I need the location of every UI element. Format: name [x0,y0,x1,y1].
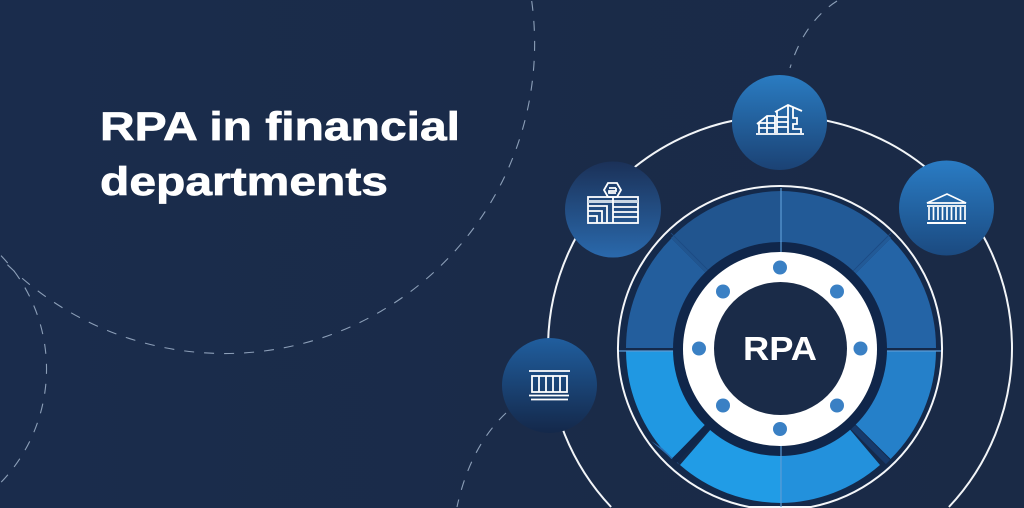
wheel dividers [619,188,941,507]
icon: bank with columns [899,160,994,256]
ring dots [692,260,868,436]
outer wheel outline [618,186,942,507]
outer orbit ring [548,116,1012,507]
segmented RPA wheel [618,186,942,507]
hub label: RPA [743,330,817,367]
center hub [714,282,847,415]
wheel segments [626,191,936,503]
icon: storefront with hexagon sign [565,162,661,258]
icon: office buildings [732,75,827,170]
title: RPA in financial [100,105,460,149]
title: departments [100,160,388,204]
icon: treasury block [502,338,597,433]
white ring [683,252,877,446]
inner dark band [673,242,887,456]
title [100,105,460,204]
